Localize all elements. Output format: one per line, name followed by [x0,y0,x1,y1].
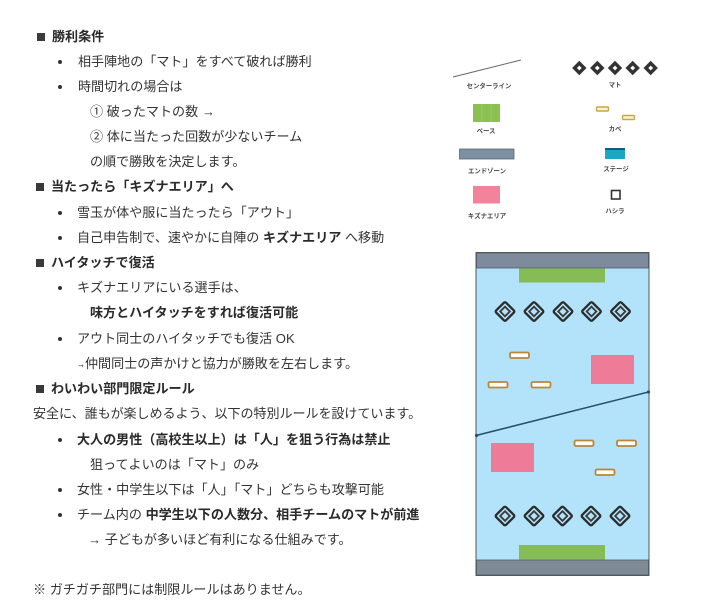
legend: center line: センターライン [467,81,512,90]
section: high five revival [36,255,358,371]
kizuna area bottom [491,443,534,472]
base bottom [519,545,605,560]
text: decision order: の順で勝敗を決定します。 [90,154,245,169]
section: victory conditions [37,29,312,169]
legend: center line [453,60,521,90]
legend: base [473,104,500,135]
heading: waiwai rules: わいわい部門限定ルール [51,381,195,396]
text: teamwork: → [77,356,85,371]
text: criterion 1: ① 破ったマトの数 → [90,104,215,119]
text: children advantage: → 子どもが多いほど有利になる仕組みです。 [88,532,352,547]
bullet: mats advance: チーム内の 中学生以下の人数分、相手チームのマトが前進 [77,507,419,522]
bullet: out: 雪玉が体や服に当たったら「アウト」 [77,205,299,220]
legend: kizuna area [468,186,507,220]
text: intro: 安全に、誰もが楽しめるよう、以下の特別ルールを設けています。 [33,406,421,421]
base top [519,268,605,282]
bullet: break all mats: 相手陣地の「マト」をすべて破れば勝利 [78,54,312,69]
end zone bottom [476,560,648,575]
kizuna area top [591,355,634,384]
bullet: outs: アウト同士のハイタッチでも復活 OK [77,331,295,346]
mats top [495,302,630,321]
text: revival bold: 味方とハイタッチをすれば復活可能 [90,305,298,320]
legend: walls: カベ [609,125,622,133]
field diagram [475,252,650,576]
heading: victory conditions: 勝利条件 [52,29,104,44]
heading: high five: ハイタッチで復活 [51,255,155,270]
legend: walls [596,107,634,133]
legend: stage: ステージ [603,165,629,173]
note: gachigachi: ※ ガチガチ部門には制限ルールはありません。 [33,582,311,597]
legend: kizuna area: キズナエリア [468,211,507,220]
walls top [488,352,550,388]
field background [476,252,649,576]
section: waiwai rules [33,381,421,547]
legend: base: ベース [477,127,495,135]
text: teamwork: 仲間同士の声かけと協力が勝敗を左右します。 [85,356,358,371]
bullet: move: 自己申告制で、速やかに自陣の キズナエリア へ移動 [77,230,384,245]
bullet: adult men: 大人の男性（高校生以上）は「人」を狙う行為は禁止 [77,432,390,447]
legend: pillar [605,190,625,215]
mats bottom [495,506,630,526]
section: kizuna area [36,179,384,245]
walls bottom [574,440,636,475]
legend: end zone [460,149,514,175]
legend: end zone: エンドゾーン [468,167,507,175]
text: criterion 2: ② 体に当たった回数が少ないチーム [90,129,302,144]
end zone top [476,253,648,268]
bullet: time up: 時間切れの場合は [78,79,182,94]
legend: pillar: ハシラ [605,207,625,215]
text: mats only: 狙ってよいのは「マト」のみ [90,457,259,472]
legend: mats: マト [609,81,621,89]
legend: mats [574,63,656,89]
bullet: women: 女性・中学生以下は「人」「マト」どちらも攻撃可能 [77,482,384,497]
legend: stage [603,148,629,173]
center line [475,390,650,437]
heading: kizuna area: 当たったら「キズナエリア」へ [51,179,234,194]
bullet: players in area: キズナエリアにいる選手は、 [77,280,247,295]
